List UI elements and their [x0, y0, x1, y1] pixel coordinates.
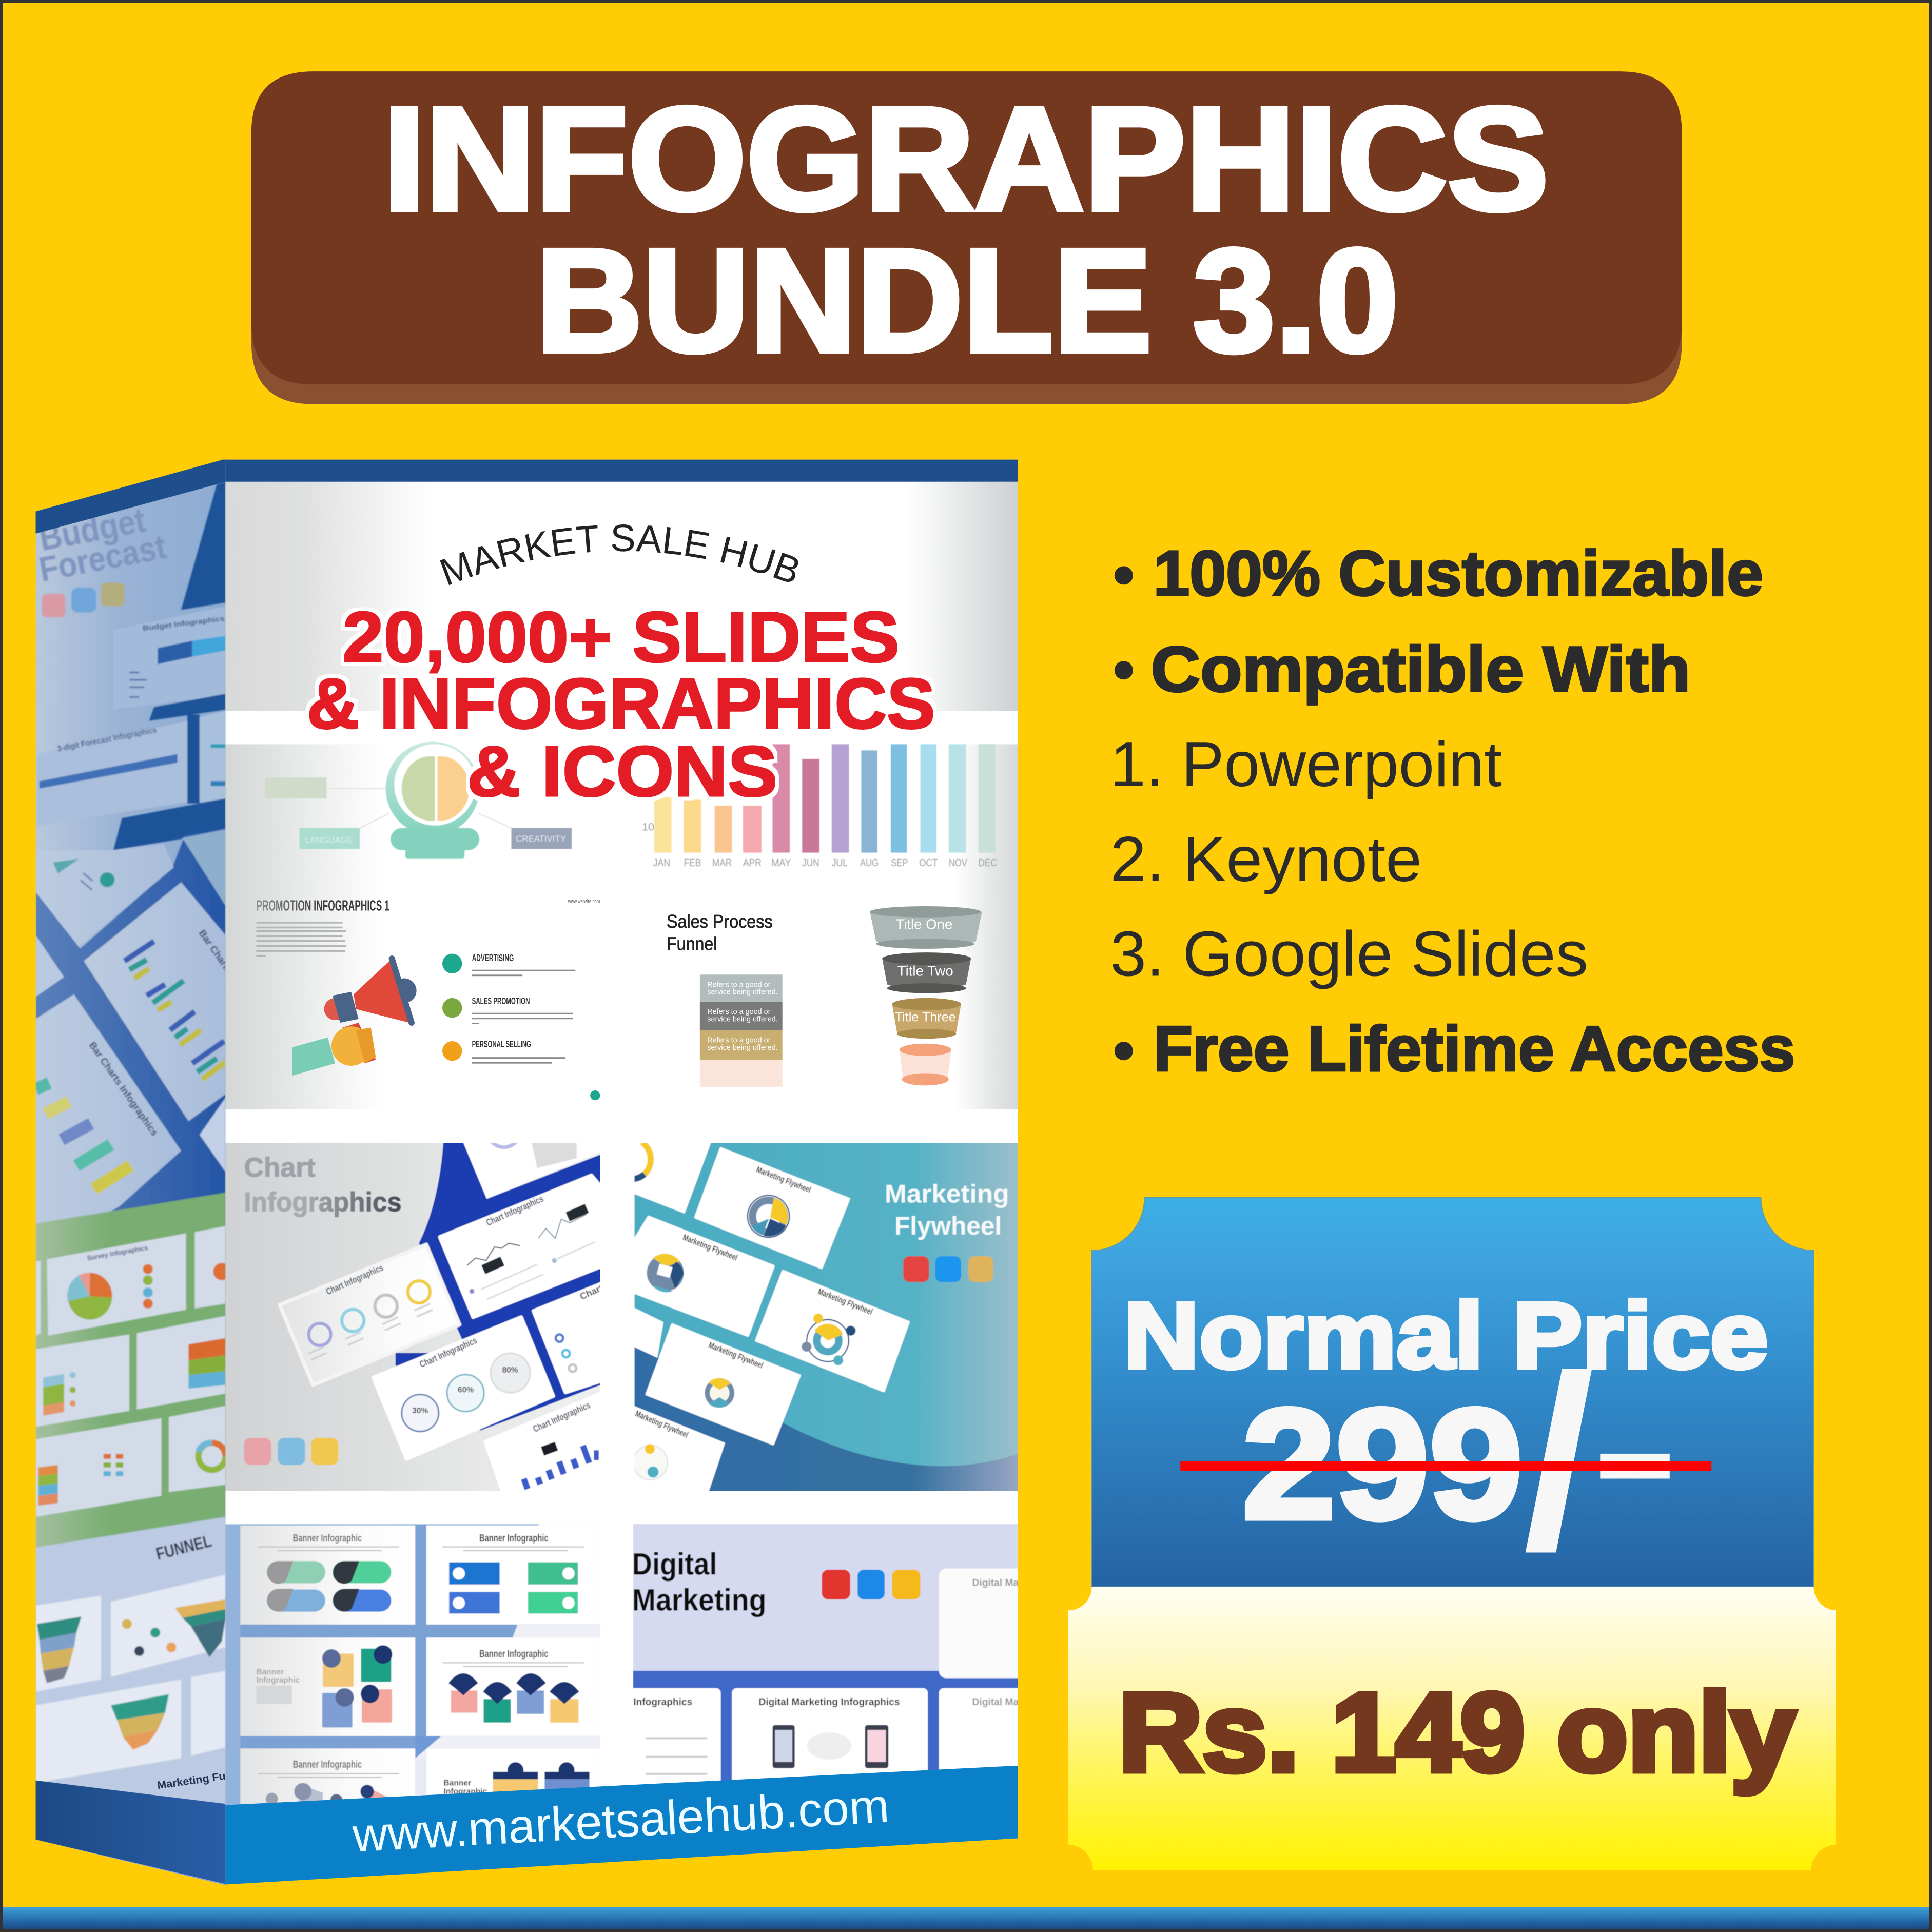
flywheel title: Marketing	[885, 1179, 1009, 1208]
side card c with bars	[36, 994, 181, 1244]
green panel stacks	[38, 1338, 225, 1506]
funnel graphics	[37, 1616, 81, 1640]
box side face: Marketing Funnel	[157, 1766, 249, 1791]
side title budget forecast: Forecast	[36, 528, 169, 589]
slide: month bar chart: JUN	[802, 857, 819, 869]
icon: megaphone with hand	[292, 959, 417, 1076]
card: line charts: Chart Infographics	[484, 1194, 545, 1228]
heading line 1: 20,000+ SLIDES	[343, 597, 900, 677]
item: personal selling: PERSONAL SELLING	[472, 1039, 531, 1049]
box front base	[225, 460, 1018, 1811]
side small cards	[36, 935, 64, 997]
slide: marketing flywheel: Flywheel	[894, 1211, 1002, 1240]
heading line 2: & INFOGRAPHICS	[307, 663, 935, 744]
side wedge	[181, 482, 225, 610]
item: advertising	[442, 953, 575, 976]
card: circle percent: 80%	[502, 1366, 518, 1375]
banner right fades	[513, 1625, 600, 1637]
side card forecast table	[37, 721, 187, 826]
slide: digital marketing	[622, 1521, 1025, 1793]
banner card 3: Banner	[256, 1668, 284, 1676]
digital blue band	[631, 1671, 1022, 1793]
item: google slides: 3. Google Slides	[1110, 919, 1588, 990]
phones and cloud	[773, 1725, 795, 1768]
banner card 4: Banner Infographic	[479, 1649, 549, 1660]
slide: promotion infographics: www.website.com	[568, 899, 600, 905]
website url: www.marketsalehub.com	[350, 1779, 891, 1862]
box side face	[36, 460, 226, 1885]
slide: brain diagram: LANGUAGE	[305, 835, 353, 845]
slide: month bar chart: JUL	[832, 857, 848, 869]
side title budget forecast: Budget	[36, 501, 149, 558]
side card budget	[113, 606, 225, 710]
digital top card: Digital Ma	[972, 1577, 1019, 1588]
slide: month bar chart: APR	[743, 857, 762, 869]
funnel table: service being offered.	[707, 988, 778, 997]
side card c with bars: Bar Charts Infographics	[87, 1040, 160, 1138]
slide: month bar chart: SEP	[891, 857, 908, 869]
slide: chart infographics: Infographics	[244, 1187, 402, 1217]
funnel cylinder two: Title Two	[897, 963, 953, 979]
side card a	[36, 844, 174, 946]
slide: brain diagram: CREATIVITY	[516, 834, 566, 844]
banner card 1: Banner Infographic	[293, 1533, 362, 1544]
item: personal selling	[442, 1039, 565, 1064]
card: ring row	[280, 1244, 460, 1385]
digital lower cards: Infographics	[633, 1697, 692, 1708]
card: circle percent: Chart Infographics	[418, 1335, 478, 1370]
side top dark band	[36, 460, 225, 534]
flywheel card 3	[756, 1271, 909, 1391]
strikethrough	[1180, 1461, 1711, 1471]
card: circle percent	[374, 1317, 553, 1459]
old price slash: /	[1523, 1324, 1595, 1600]
side green panel	[36, 1193, 230, 1548]
card: small legend	[534, 1282, 604, 1392]
banner card 1	[240, 1526, 415, 1625]
product box	[36, 460, 1018, 1885]
side card b with bars: Bar Charts	[196, 928, 234, 975]
bottom blue band	[0, 1907, 1932, 1932]
funnel cylinder two	[882, 952, 971, 993]
chart slide app icons	[244, 1438, 338, 1465]
slide: month bar chart: OCT	[919, 857, 938, 869]
brain head	[386, 741, 479, 835]
banner card 6: Banner	[443, 1779, 471, 1787]
flywheel card 2: Marketing Flywheel	[681, 1233, 739, 1262]
slide: month bar chart: 10	[642, 820, 654, 833]
offer price text: Rs. 149 only	[1119, 1670, 1795, 1794]
funnel cylinder three: Title Three	[895, 1010, 956, 1025]
slide: month bar chart: MAR	[712, 857, 732, 869]
slide: month bar chart: FEB	[684, 857, 701, 869]
slide: digital marketing: Marketing	[632, 1583, 767, 1617]
card: circle percent: 30%	[412, 1407, 428, 1415]
slide: promotion infographics	[256, 897, 600, 1100]
funnel table: Refers to a good or	[707, 981, 771, 989]
slide: promotion infographics: PROMOTION INFOGRAPHICS 1	[256, 897, 389, 914]
slide: month bar chart: DEC	[979, 857, 997, 869]
flywheel card 4: Marketing Flywheel	[707, 1340, 765, 1371]
card: line charts	[440, 1176, 604, 1317]
green panel ring	[199, 1443, 225, 1470]
digital lower cards: Digital Marketing Infographics	[758, 1697, 900, 1708]
card top	[462, 1140, 604, 1199]
promotion body lines	[256, 922, 346, 957]
panel: normal price	[1091, 1198, 1813, 1600]
panel: offer price	[1068, 1587, 1836, 1870]
flywheel card 1: Marketing Flywheel	[755, 1165, 812, 1195]
funnel cylinder four	[900, 1044, 951, 1085]
flywheel app icons	[903, 1256, 993, 1282]
banner card 2: Banner Infographic	[479, 1533, 549, 1544]
title line 2: BUNDLE 3.0	[536, 218, 1398, 382]
funnel table: service being offered.	[707, 1016, 778, 1024]
title line 1: INFOGRAPHICS	[383, 76, 1549, 241]
flywheel card 1	[695, 1148, 849, 1268]
title banner	[251, 71, 1682, 404]
item: advertising: ADVERTISING	[472, 953, 514, 963]
digital lower cards	[622, 1688, 1025, 1793]
item: sales promotion: SALES PROMOTION	[472, 996, 530, 1006]
banner card 5: Banner Infographic	[293, 1759, 362, 1770]
box top strip	[225, 460, 1018, 482]
card: circle percent: 60%	[458, 1385, 474, 1394]
normal price label: Normal Price	[1124, 1283, 1768, 1388]
feature list	[1110, 538, 1795, 1085]
slide: month bar chart: MAY	[771, 857, 791, 869]
item: powerpoint: 1. Powerpoint	[1110, 729, 1502, 800]
slide: month bar chart: JAN	[653, 857, 670, 869]
card: ring row: Chart Infographics	[324, 1262, 385, 1297]
banner card 6	[426, 1748, 600, 1822]
cover heading	[307, 597, 935, 811]
flywheel card 4	[647, 1324, 799, 1444]
funnel table	[700, 974, 783, 1087]
side funnel panel: FUNNEL	[154, 1532, 213, 1564]
slide: sales process funnel: Funnel	[667, 933, 717, 954]
side blue lattice	[36, 828, 225, 1244]
feature: compatible: Compatible With	[1151, 634, 1690, 705]
funnel table: Refers to a good or	[707, 1036, 771, 1044]
flywheel card 5	[631, 1404, 725, 1495]
slide: month bar chart: NOV	[949, 857, 967, 869]
side funnel panel	[36, 1517, 225, 1824]
banner card 5	[240, 1748, 415, 1822]
funnel cylinder three	[892, 998, 961, 1039]
banner card 3	[240, 1637, 415, 1736]
slide: brain diagram	[265, 741, 572, 859]
side app icons	[42, 583, 125, 617]
slide: month bar chart	[642, 744, 997, 869]
flywheel card 6	[631, 1306, 663, 1358]
banner card 2	[426, 1526, 600, 1625]
side small card	[200, 711, 225, 802]
flywheel card 2	[631, 1217, 773, 1336]
banner card 6: Infographic	[443, 1787, 487, 1796]
side card budget: Budget Infographics	[142, 615, 225, 633]
funnel table: service being offered.	[707, 1044, 778, 1052]
funnel cylinder one: Title One	[895, 916, 952, 932]
flywheel card 3: Marketing Flywheel	[816, 1286, 874, 1317]
feature: lifetime: Free Lifetime Access	[1153, 1013, 1795, 1085]
banner card 3: Infographic	[256, 1676, 300, 1685]
card: small legend: Chart	[578, 1282, 604, 1302]
side card forecast table: 3-digit Forecast Infographics	[56, 726, 158, 754]
cover header	[225, 482, 1018, 1109]
blue backdrop	[396, 1140, 604, 1431]
slide: marketing flywheel	[631, 1140, 1022, 1495]
funnel cylinder one	[870, 906, 982, 949]
heading line 3: & ICONS	[467, 731, 777, 811]
slide: chart infographics	[222, 1140, 604, 1496]
flywheel wave	[631, 1345, 1022, 1495]
side base	[36, 1781, 225, 1884]
flywheel card 5: Marketing Flywheel	[634, 1409, 690, 1440]
digital lower cards: Digital Ma	[972, 1697, 1019, 1708]
slide: sales process funnel: Sales Process	[667, 911, 773, 932]
side title budget forecast	[39, 510, 167, 582]
old price: 299	[1242, 1376, 1523, 1551]
digital app icons	[822, 1570, 921, 1599]
card: bar chart: Chart Infographics	[532, 1400, 592, 1434]
digital top card	[939, 1569, 1025, 1678]
funnel table: Refers to a good or	[707, 1008, 771, 1016]
green panel pie	[67, 1263, 230, 1320]
slide: sales process funnel	[667, 906, 982, 1087]
old price dash: -	[1589, 1331, 1681, 1565]
box front band	[225, 1766, 1018, 1885]
banner card 4	[426, 1637, 600, 1736]
item: sales promotion	[442, 996, 573, 1024]
side green panel: Survey Infographics	[86, 1244, 148, 1262]
feature: customizable: 100% Customizable	[1153, 538, 1763, 609]
slide: banner infographic	[225, 1524, 600, 1822]
card: bar chart	[485, 1392, 604, 1496]
side card b with bars	[84, 882, 234, 1121]
chart slide title: Chart	[244, 1153, 316, 1183]
slide: month bar chart: AUG	[860, 857, 879, 869]
item: keynote: 2. Keynote	[1110, 824, 1422, 895]
flywheel card top	[631, 1140, 712, 1214]
brand arc text: MARKET SALE HUB	[440, 524, 798, 585]
digital title: Digital	[632, 1547, 717, 1582]
